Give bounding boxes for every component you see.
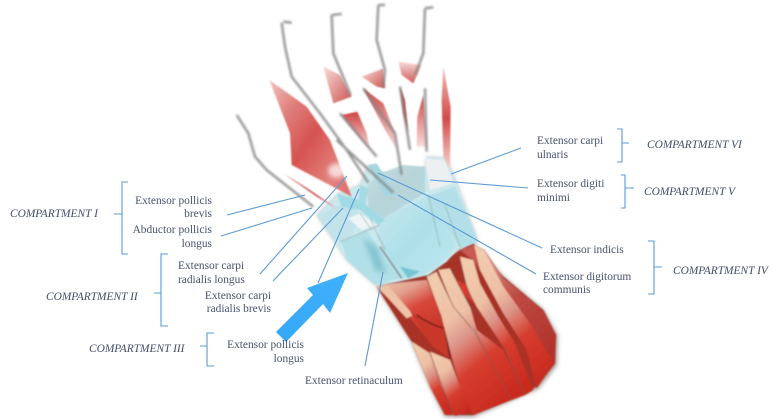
finger muscles [237,5,451,208]
label: extensor digiti minimi: Extensor digiti [537,178,604,190]
label: extensor carpi radialis brevis: Extensor carpi [205,290,271,302]
label: extensor carpi radialis brevis: radialis brevis [207,303,272,315]
finger outlines [237,5,433,207]
leader lines [221,148,542,366]
bracket: compartment V [621,175,634,208]
heading: compartment IV: COMPARTMENT IV [673,265,770,277]
heading: compartment III: COMPARTMENT III [89,343,186,355]
hand illustration [237,5,557,417]
label: extensor digitorum communis: communis [543,284,591,296]
label: extensor carpi ulnaris: ulnaris [537,149,569,161]
bracket: compartment VI [617,129,629,162]
label: abductor pollicis longus: Abductor pollicis [133,224,213,236]
label: abductor pollicis longus: longus [182,238,213,250]
heading: compartment V: COMPARTMENT V [644,186,737,198]
label: extensor pollicis brevis: brevis [184,208,213,220]
forearm muscles [377,243,557,417]
bracket: compartment II [154,254,168,326]
label: extensor pollicis longus: Extensor pollicis [227,339,305,351]
label: extensor pollicis brevis: Extensor pollicis [135,195,213,207]
heading: compartment II: COMPARTMENT II [46,291,139,303]
muscle: thumb side [269,80,352,197]
arrow [276,273,348,342]
label: extensor digiti minimi: minimi [537,192,570,204]
heading: compartment I: COMPARTMENT I [10,208,99,220]
extensor retinaculum [317,157,478,285]
label: extensor pollicis longus: longus [274,353,305,365]
bracket: compartment I [114,182,128,254]
label: extensor carpi radialis longus: Extensor carpi [178,260,244,272]
bracket: compartment III [200,333,214,366]
label: extensor carpi ulnaris: Extensor carpi [537,135,603,147]
bracket: compartment IV [648,241,662,294]
label: extensor indicis: Extensor indicis [550,244,624,256]
heading: compartment VI: COMPARTMENT VI [647,139,743,151]
label: extensor digitorum communis: Extensor digitorum [543,271,631,283]
label: extensor retinaculum: Extensor retinaculum [305,375,403,387]
label: extensor carpi radialis longus: radialis longus [178,274,245,286]
